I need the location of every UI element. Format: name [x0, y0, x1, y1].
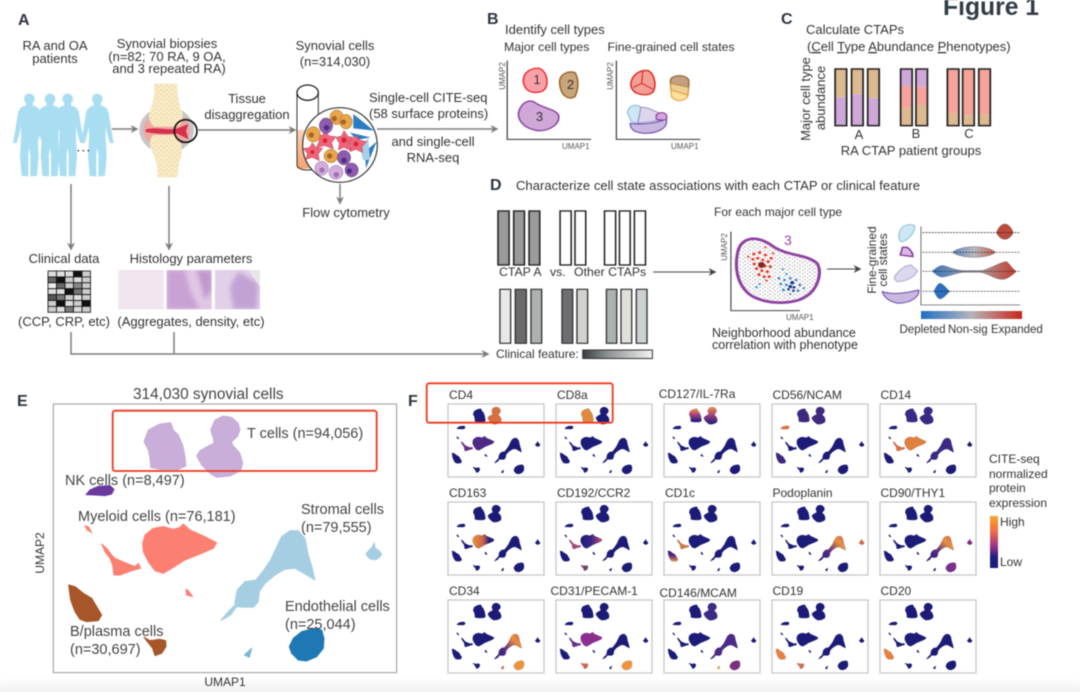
panel B: identify cell types: [487, 11, 735, 151]
feature plot: CD31: CD31/PECAM-1: [550, 584, 638, 598]
legend labels: Low: [1000, 555, 1022, 569]
legend color bar: [990, 516, 998, 568]
histology images: [118, 270, 260, 309]
labels: CTAP A vs other CTAPs: CTAP A: [499, 265, 542, 279]
y axis label: Major cell type: [798, 57, 813, 141]
chart: major cell type UMAP: 2: [567, 77, 574, 92]
panel F letter: F: [408, 393, 418, 410]
axis label: UMAP2: UMAP2: [33, 532, 47, 574]
group labels: A: [855, 127, 864, 142]
axis label: fine-grained cell states: Fine-grained: [865, 226, 879, 294]
group labels: B: [912, 126, 920, 141]
arrow: patients to clinical data: [70, 184, 72, 249]
chart: neighborhood abundance UMAP: UMAP2: [720, 233, 729, 261]
caption: neighborhood abundance: correlation with phenotype: [712, 338, 858, 352]
legend title: normalized: [989, 467, 1048, 481]
feature plot: CD34: CD34: [449, 584, 480, 598]
clusters: cell types: [69, 416, 382, 661]
arrow: bars to neighborhood plot: [653, 271, 715, 273]
axis label second line: cell states: [876, 233, 890, 287]
feature plot: CD56: [772, 388, 868, 477]
feature plot: CD4: CD4: [449, 388, 473, 402]
chart: violin plots: [882, 224, 1020, 305]
feature plot: CD14: [880, 388, 976, 477]
panel B letter: B: [487, 11, 499, 28]
panel A: study workflow: [13, 12, 497, 354]
subheading: major cell types: Major cell types: [504, 40, 589, 54]
heading: synovial cells: Synovial cells: [296, 38, 375, 53]
legend: clinical feature gradient: [583, 350, 652, 358]
connector: clinical and histology to bottom line: [71, 332, 174, 354]
feature plot: CD163: CD163: [449, 486, 487, 500]
feature plot: Podoplanin: [772, 486, 868, 575]
panel D: cell state associations: [490, 177, 1043, 361]
feature plot: CD192: [556, 486, 652, 575]
caption: neighborhood abundance: Neighborhood abundance: [712, 326, 856, 340]
cluster labels: Stromal cells: [301, 502, 384, 518]
panel E letter: E: [17, 393, 28, 410]
frame: UMAP plot: [53, 404, 397, 673]
highlight: T cells: [113, 411, 377, 471]
feature plot: CD34: [448, 584, 544, 673]
axis label: UMAP1: UMAP1: [204, 675, 246, 689]
color bar: depleted to expanded: [921, 311, 1022, 319]
text: CITE-seq assay: (58 surface proteins): [369, 106, 488, 121]
chart: fine-grained cell state UMAP: UMAP2: [606, 62, 615, 90]
legend title: CITE-seq: [989, 452, 1040, 466]
subheading: fine-grained states: Fine-grained cell states: [608, 40, 735, 54]
feature plot: CD127: [659, 387, 760, 477]
title: synovial cells: 314,030 synovial cells: [133, 386, 284, 403]
chart: major cell type UMAP: UMAP2: [498, 62, 507, 90]
feature plot: CD146: [660, 586, 760, 673]
feature plot: CD1c: CD1c: [665, 486, 695, 500]
heading: synovial biopsies: and 3 repeated RA): [112, 61, 226, 76]
panel D letter: D: [490, 177, 502, 194]
heatmap: clinical data: [48, 271, 90, 312]
subheading: for each major cell type: For each major cell type: [714, 205, 842, 219]
panel C letter: C: [781, 11, 793, 28]
labels: CTAP A vs other CTAPs: Other CTAPs: [574, 265, 646, 279]
feature plot: CD8a: [556, 388, 652, 477]
cluster labels: (n=25,044): [285, 617, 356, 633]
bars: clinical feature: [500, 289, 647, 343]
chart: neighborhood abundance UMAP: 3: [784, 232, 792, 248]
chart: major cell type UMAP: [498, 61, 591, 151]
chart: fine-grained cell state UMAP: [606, 61, 700, 151]
caption: histology: (Aggregates, density, etc): [117, 314, 265, 329]
feature plot: CD20: [880, 584, 976, 673]
text: RNA-seq assay: and single-cell: [391, 134, 475, 149]
group labels: C: [964, 126, 974, 141]
chart: major cell type UMAP: 1: [533, 72, 541, 87]
heading: histology parameters: Histology parameters: [130, 251, 253, 266]
feature plot: CD90: CD90/THY1: [880, 486, 946, 500]
cluster labels: (n=30,697): [70, 642, 141, 658]
caption: clinical data: (CCP, CRP, etc): [18, 314, 110, 329]
chart: major cell type UMAP: UMAP1: [562, 142, 590, 151]
feature plot: CD31: [550, 584, 652, 673]
arrow: to flow cytometry: [339, 184, 341, 203]
heading: characterize: Characterize cell state associations with each CTAP or clinical feature: [516, 178, 920, 193]
cluster labels: B/plasma cells: [70, 624, 163, 640]
color bar labels: Depleted: [900, 324, 946, 336]
feature plot: CD127: CD127/IL-7Ra: [659, 387, 736, 401]
arrow: biopsy to histology: [168, 186, 170, 249]
cluster labels: (n=79,555): [301, 520, 372, 536]
labels: CTAP A vs other CTAPs: vs.: [550, 265, 566, 279]
subheading: CTAP definition: (Cell Type Abundance Phenotypes): [807, 39, 1011, 54]
color bar labels: Expanded: [991, 324, 1043, 336]
arrow: to panel D: [70, 353, 488, 355]
panel F: protein feature plots: [408, 383, 1048, 673]
text: CITE-seq assay: Single-cell CITE-seq: [369, 90, 488, 105]
heading: patients: RA and OA: [22, 38, 88, 53]
feature plot: Podoplanin: Podoplanin: [772, 486, 833, 500]
icon: tube and cells: [297, 85, 377, 182]
arrow: cells to panel B: [377, 128, 497, 130]
arrow label: tissue disaggregation: Tissue: [228, 91, 266, 106]
feature plot: CD14: CD14: [880, 388, 912, 402]
y axis label second line: abundance: [813, 66, 828, 130]
cluster labels: Endothelial cells: [285, 599, 390, 615]
feature plot: CD19: CD19: [772, 584, 804, 598]
cluster labels: NK cells (n=8,497): [65, 473, 185, 489]
heading: clinical data: Clinical data: [29, 251, 100, 266]
feature plot: CD19: [772, 584, 868, 673]
chart: neighborhood abundance UMAP: UMAP1: [786, 313, 814, 322]
legend title: protein: [989, 481, 1026, 495]
chart: fine-grained cell state UMAP: UMAP1: [671, 142, 699, 151]
icon: patient silhouettes: [13, 94, 113, 176]
stacked bars: CTAP groups: [835, 69, 990, 126]
icon: knee joint: [139, 83, 197, 177]
heading: synovial cells: (n=314,030): [300, 54, 370, 69]
axis caption: RA CTAP patient groups: [841, 143, 982, 158]
feature plot: CD56: CD56/NCAM: [772, 388, 842, 402]
text: flow cytometry: Flow cytometry: [302, 205, 390, 220]
feature plot: CD146: CD146/MCAM: [660, 586, 737, 600]
arrow label: tissue disaggregation: disaggregation: [204, 107, 290, 122]
text: RNA-seq assay: RNA-seq: [407, 150, 459, 165]
panel E: main UMAP: [17, 386, 397, 689]
heading: synovial biopsies: Synovial biopsies: [117, 36, 218, 51]
cluster labels: T cells (n=94,056): [247, 426, 363, 442]
color bar labels: Non-sig: [948, 324, 988, 336]
legend labels: High: [1000, 515, 1025, 529]
feature plot: CD163: [448, 486, 544, 575]
chart: major cell type UMAP: 3: [536, 109, 543, 124]
feature plot: CD90: [880, 486, 976, 575]
panel A letter: A: [18, 12, 30, 29]
cluster labels: Myeloid cells (n=76,181): [78, 509, 236, 525]
arrow: tissue to cells: [197, 129, 295, 131]
heading: synovial biopsies: (n=82; 70 RA, 9 OA,: [108, 49, 226, 64]
legend title: expression: [989, 496, 1047, 510]
chart: neighborhood abundance UMAP: [720, 232, 819, 322]
feature plot: CD1c: [664, 486, 760, 575]
feature plot: CD192: CD192/CCR2: [557, 486, 631, 500]
arrow: UMAP to violins: [827, 268, 860, 270]
bars: CTAP A versus other CTAPs: [498, 211, 645, 265]
arrow: patients to biopsy: [112, 128, 137, 130]
heading: identify cell types: Identify cell types: [505, 22, 605, 37]
highlight: CD4 and CD8a: [427, 383, 613, 423]
feature plot: CD20: CD20: [880, 584, 912, 598]
heading: calculate CTAPs: Calculate CTAPs: [806, 22, 905, 37]
feature plot: CD4: [448, 388, 544, 477]
label: clinical feature: Clinical feature:: [496, 347, 579, 361]
heading: patients: patients: [32, 51, 78, 66]
feature plot: CD8a: CD8a: [557, 388, 588, 402]
panel C: CTAPs: [781, 11, 1011, 158]
